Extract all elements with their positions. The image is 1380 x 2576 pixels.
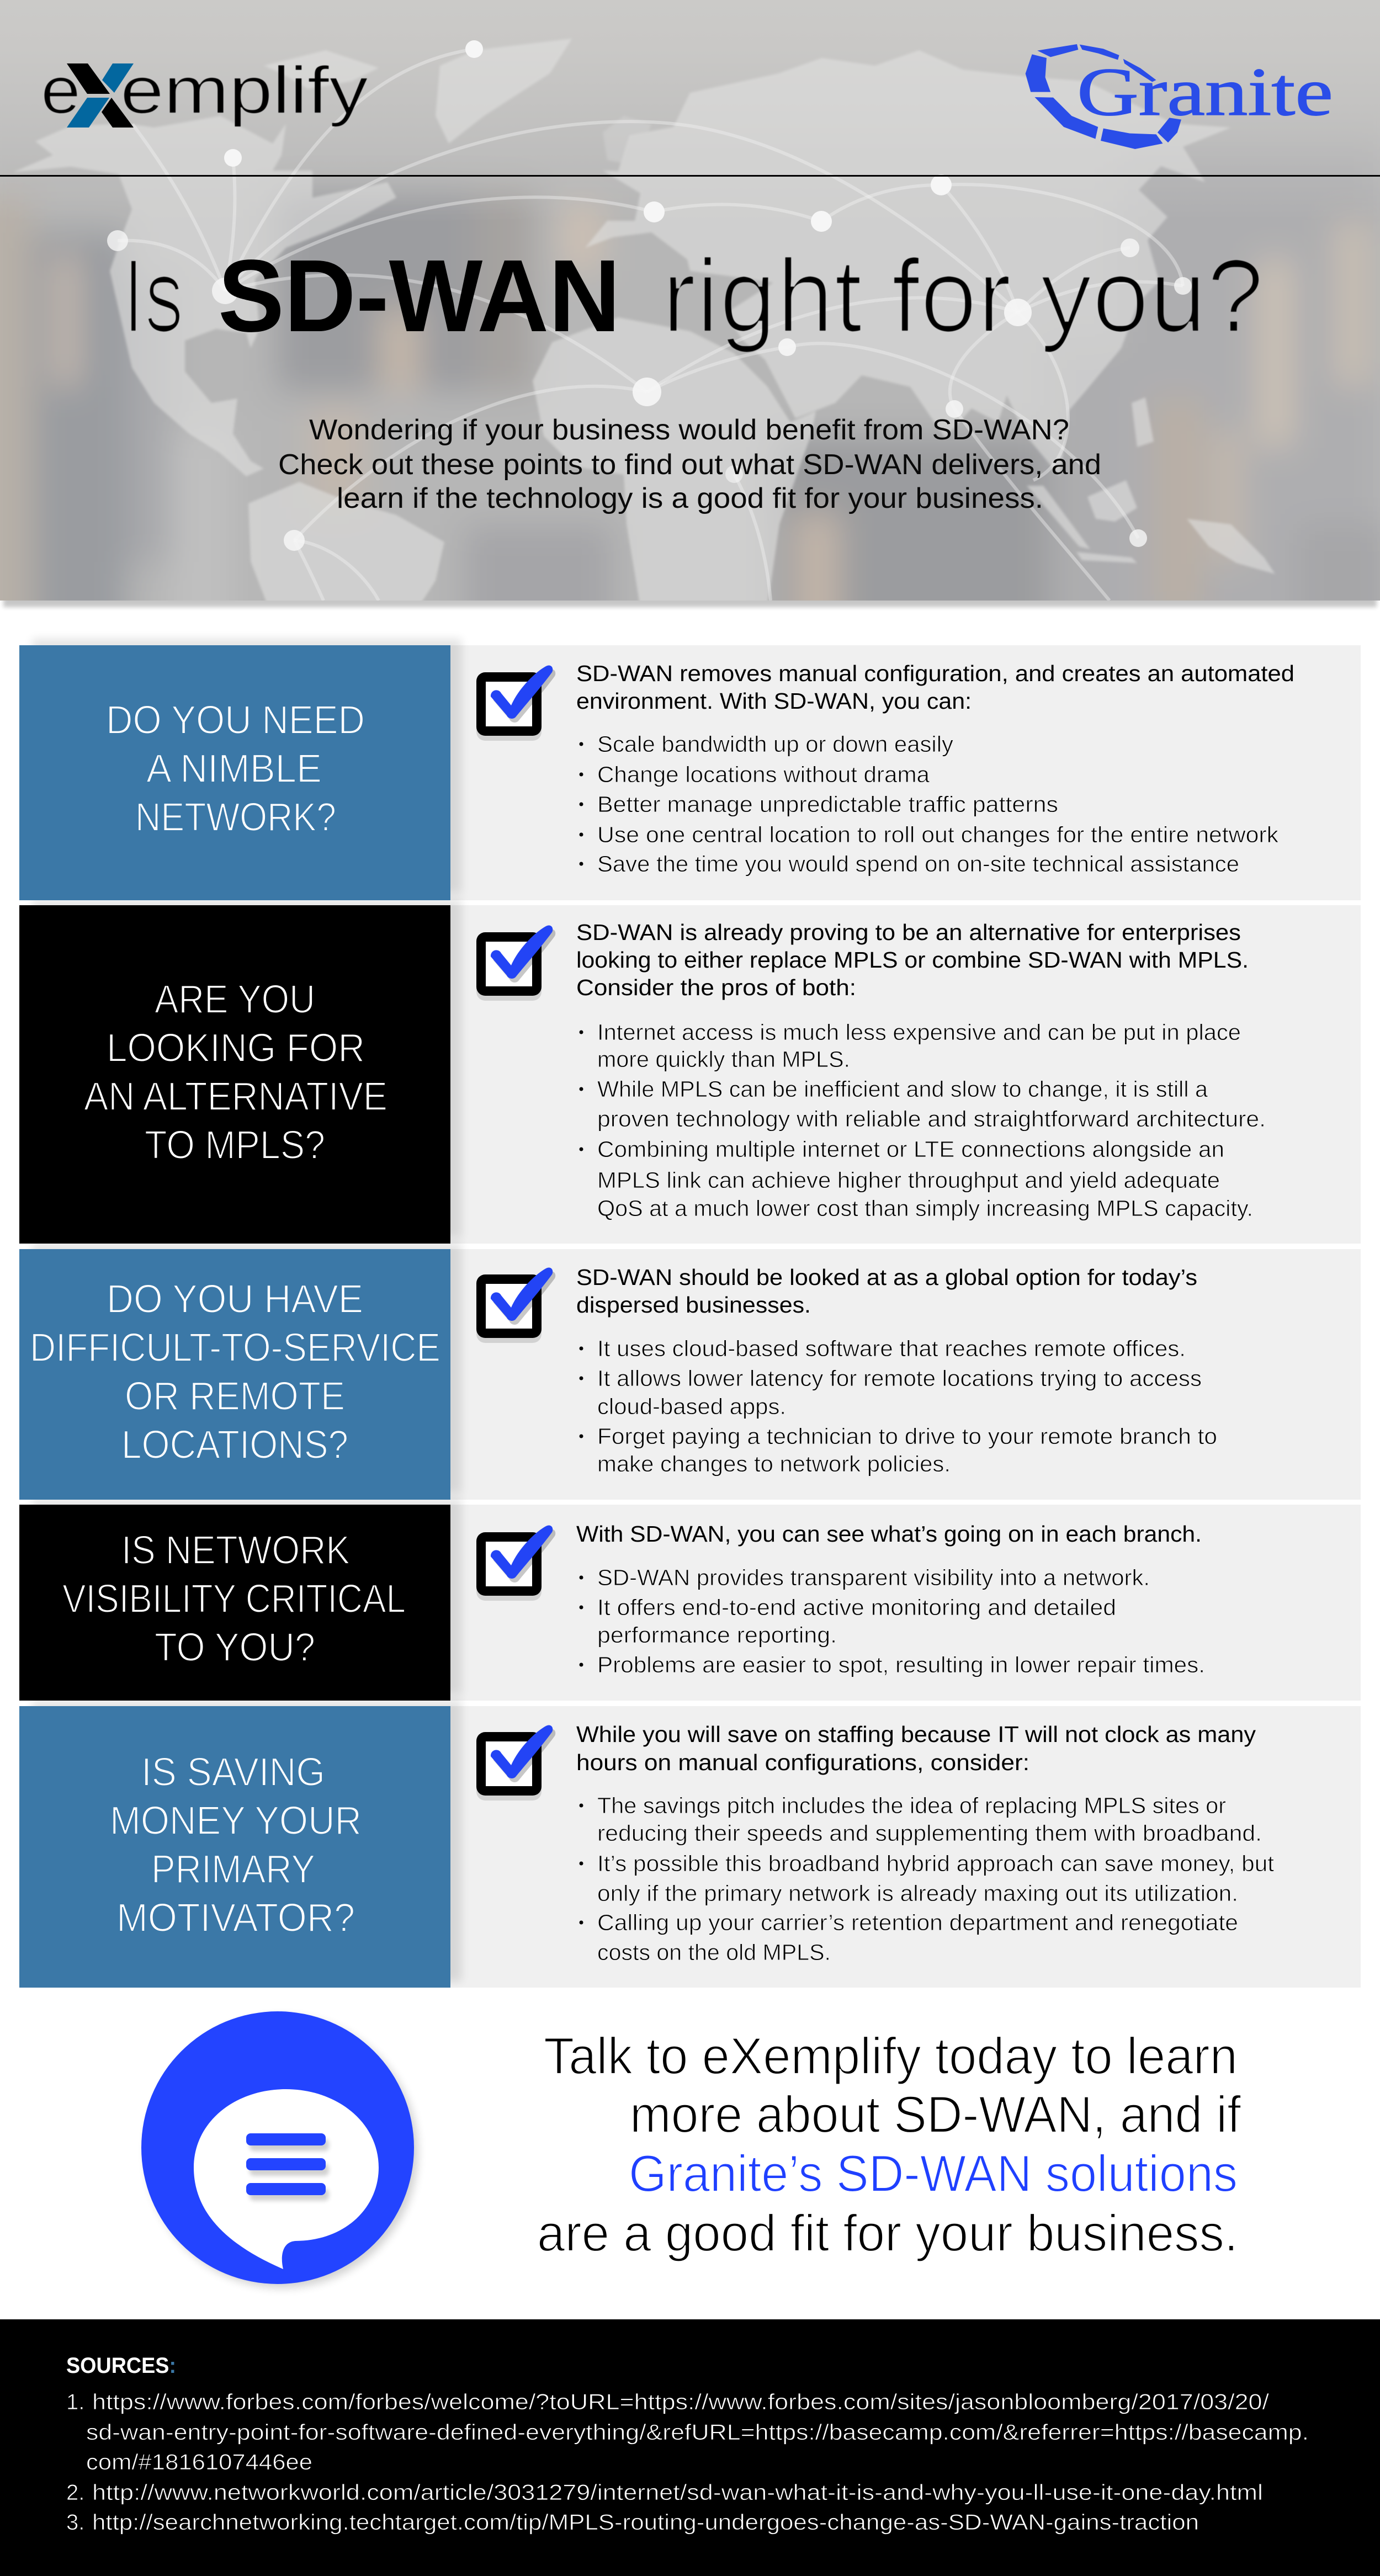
bullet list: It allows lower latency for remote locations trying to access <box>597 1366 1202 1391</box>
icon: checkbox <box>476 1267 555 1343</box>
top haze <box>0 0 1380 171</box>
header shadow <box>3 595 1377 607</box>
lead text <box>576 920 1249 1000</box>
lead text: dispersed businesses. <box>576 1292 811 1318</box>
lead text: While you will save on staffing because IT will not clock as many <box>576 1722 1256 1747</box>
icon: chat bubble <box>141 2011 418 2288</box>
logo: Granite: Granite <box>1077 54 1333 130</box>
bullet list: performance reporting. <box>597 1622 837 1648</box>
intro text: learn if the technology is a good fit for your business. <box>337 482 1043 514</box>
question text: AN ALTERNATIVE <box>84 1075 388 1119</box>
source links: http://www.networkworld.com/article/3031279/internet/sd-wan-what-it-is-and-why-you-ll-use-it-one-day.html <box>92 2481 1263 2505</box>
lead text: looking to either replace MPLS or combine SD-WAN with MPLS. <box>576 947 1249 973</box>
source links: http://searchnetworking.techtarget.com/tip/MPLS-routing-undergoes-change-as-SD-WAN-gains-traction <box>92 2510 1199 2535</box>
question text: LOOKING FOR <box>107 1026 365 1070</box>
lead text: environment. With SD-WAN, you can: <box>576 688 972 714</box>
bullet list: reducing their speeds and supplementing them with broadband. <box>597 1820 1262 1846</box>
question text: DIFFICULT-TO-SERVICE <box>30 1326 440 1370</box>
bullet list: Combining multiple internet or LTE connections alongside an <box>597 1136 1224 1162</box>
bullet list: costs on the old MPLS. <box>597 1940 831 1965</box>
panel: saving money <box>19 1706 1275 1988</box>
call to action text: more about SD-WAN, and if <box>630 2085 1241 2143</box>
panel: alternative to MPLS <box>19 905 1266 1244</box>
question tile <box>19 645 450 900</box>
intro text: Wondering if your business would benefit from SD-WAN? <box>309 414 1069 446</box>
bullet list: only if the primary network is already maxing out its utilization. <box>597 1881 1238 1906</box>
icon: checkbox <box>476 1725 555 1800</box>
world map continents <box>13 39 1275 607</box>
title: right for you? <box>662 239 1264 353</box>
question text <box>84 978 388 1167</box>
question text: TO YOU? <box>155 1626 315 1670</box>
logo: eXemplify: e <box>41 52 81 128</box>
question text: DO YOU NEED <box>106 698 365 742</box>
question text <box>62 1528 406 1670</box>
question text: MONEY YOUR <box>110 1799 362 1843</box>
header banner <box>0 0 1380 640</box>
question text: IS NETWORK <box>121 1528 350 1573</box>
bullet list: Scale bandwidth up or down easily <box>597 731 954 757</box>
source links <box>66 2390 1309 2535</box>
bullet list: Internet access is much less expensive and can be put in place <box>597 1019 1241 1045</box>
source links: com/#1816107446ee <box>86 2450 312 2474</box>
call to action text <box>537 2027 1241 2262</box>
question text: VISIBILITY CRITICAL <box>62 1577 406 1621</box>
question tile <box>19 1706 450 1988</box>
bullet list: The savings pitch includes the idea of replacing MPLS sites or <box>597 1793 1226 1818</box>
bullet list: It’s possible this broadband hybrid approach can save money, but <box>597 1851 1275 1876</box>
bullet list: make changes to network policies. <box>597 1451 951 1476</box>
question tile <box>19 905 450 1244</box>
footer: sources <box>0 2319 1380 2576</box>
bullet list: QoS at a much lower cost than simply increasing MPLS capacity. <box>597 1196 1253 1221</box>
lead text: SD-WAN is already proving to be an alternative for enterprises <box>576 920 1241 945</box>
question text: TO MPLS? <box>145 1123 325 1167</box>
source links: 1. <box>66 2390 84 2414</box>
logo: eXemplify: emplify <box>120 52 369 128</box>
bullet list: It uses cloud-based software that reaches remote offices. <box>597 1336 1186 1361</box>
panel: row backgrounds <box>450 645 1361 1988</box>
logo: eXemplify <box>41 52 369 128</box>
question tile <box>19 1505 450 1701</box>
bullet list <box>580 1336 1217 1476</box>
sources heading: SOURCES: <box>66 2354 176 2378</box>
bullet list: Use one central location to roll out changes for the entire network <box>597 822 1279 847</box>
icon: checkbox <box>476 925 555 1001</box>
lead text: SD-WAN removes manual configuration, and creates an automated <box>576 661 1294 686</box>
call to action text: are a good fit for your business. <box>537 2204 1238 2262</box>
lead text: SD-WAN should be looked at as a global option for today’s <box>576 1265 1197 1290</box>
bullet list <box>580 1565 1205 1677</box>
lead text <box>576 1722 1256 1775</box>
question text: LOCATIONS? <box>121 1423 348 1467</box>
bullet list <box>580 1793 1275 1965</box>
bullet list: SD-WAN provides transparent visibility into a network. <box>597 1565 1150 1590</box>
question text: DO YOU HAVE <box>107 1277 363 1321</box>
title: Is <box>123 239 184 353</box>
source links: 3. <box>66 2510 84 2535</box>
lead text: hours on manual configurations, consider: <box>576 1750 1029 1775</box>
bullet list: Better manage unpredictable traffic patterns <box>597 792 1058 817</box>
question text: MOTIVATOR? <box>116 1896 355 1940</box>
question text: ARE YOU <box>155 978 315 1022</box>
network arcs <box>118 49 1183 601</box>
call to action text: Talk to eXemplify today to learn <box>544 2027 1238 2085</box>
icon: checkbox <box>476 665 555 741</box>
icon: checkbox <box>476 1525 555 1601</box>
question text: PRIMARY <box>151 1847 315 1892</box>
question tile <box>19 1249 450 1500</box>
question text <box>106 698 365 840</box>
question text <box>110 1750 362 1940</box>
bullet list <box>580 731 1279 877</box>
panel: network visibility <box>19 1505 1205 1701</box>
question text <box>30 1277 440 1467</box>
lead text: With SD-WAN, you can see what’s going on in each branch. <box>576 1521 1202 1547</box>
source links: sd-wan-entry-point-for-software-defined-everything/&refURL=https://basecamp.com/&referrer=https://basecamp. <box>86 2420 1309 2445</box>
lead text: Consider the pros of both: <box>576 975 856 1000</box>
intro text: Check out these points to find out what SD-WAN delivers, and <box>278 449 1101 481</box>
question text: A NIMBLE <box>146 747 322 791</box>
title <box>123 239 1264 353</box>
bullet list: While MPLS can be inefficient and slow to change, it is still a <box>597 1076 1208 1102</box>
bullet list: Calling up your carrier’s retention department and renegotiate <box>597 1910 1238 1935</box>
blurred city background <box>0 51 1380 601</box>
network nodes <box>107 40 1192 551</box>
tile shadows <box>32 639 461 1982</box>
bullet list: cloud-based apps. <box>597 1394 786 1419</box>
bullet list <box>580 1019 1266 1221</box>
bullet list: Forget paying a technician to drive to your remote branch to <box>597 1424 1217 1449</box>
call to action text: Granite’s SD-WAN solutions <box>629 2144 1238 2202</box>
source links: https://www.forbes.com/forbes/welcome/?toURL=https://www.forbes.com/sites/jasonbloomberg/2017/03/20/ <box>92 2390 1270 2414</box>
bullet list: It offers end-to-end active monitoring and detailed <box>597 1595 1116 1620</box>
lead text <box>576 661 1294 714</box>
header divider line <box>0 175 1380 177</box>
bullet list: Change locations without drama <box>597 762 930 787</box>
bullet list: MPLS link can achieve higher throughput and yield adequate <box>597 1167 1220 1193</box>
question text: NETWORK? <box>135 795 336 840</box>
bullet list: proven technology with reliable and straightforward architecture. <box>597 1106 1266 1132</box>
bullet list: Problems are easier to spot, resulting in lower repair times. <box>597 1652 1205 1677</box>
lead text <box>576 1265 1197 1318</box>
question text: IS SAVING <box>141 1750 325 1794</box>
question text: OR REMOTE <box>125 1374 345 1419</box>
panel: difficult to service or remote locations <box>19 1249 1217 1500</box>
bullet list: Save the time you would spend on on-site technical assistance <box>597 851 1239 877</box>
panel: do you need a nimble network <box>19 645 1294 900</box>
logo: Granite <box>1026 44 1333 149</box>
title: SD-WAN <box>218 239 620 353</box>
intro text <box>278 414 1101 514</box>
bullet list: more quickly than MPLS. <box>597 1047 850 1072</box>
source links: 2. <box>66 2481 84 2505</box>
